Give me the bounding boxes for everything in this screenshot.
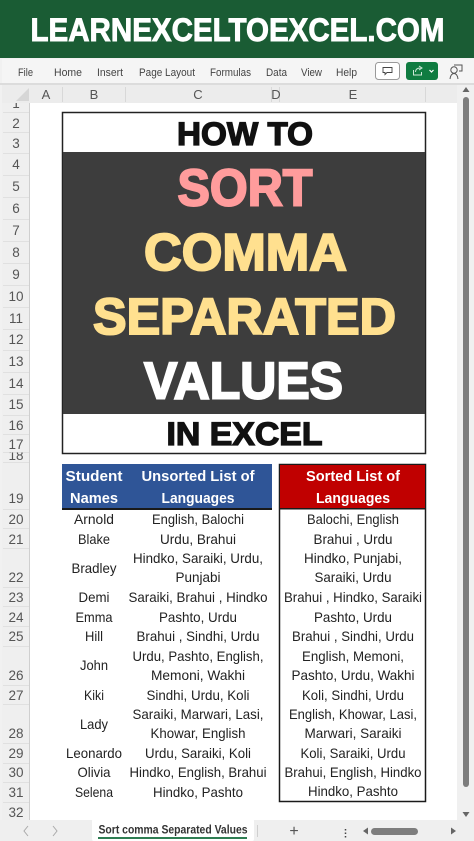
column headers: D	[271, 87, 281, 102]
row number gutter: 15	[8, 397, 24, 412]
row number gutter: 31	[8, 785, 24, 800]
ribbon menu: Page Layout	[139, 67, 195, 79]
ribbon menu: Home	[54, 67, 82, 79]
student names column: Lady	[80, 716, 108, 732]
vertical scrollbar	[457, 85, 474, 820]
heading: in excel: IN EXCEL	[166, 416, 322, 452]
student names column: Leonardo	[66, 745, 122, 761]
table header: student names and unsorted list: Languages	[162, 490, 234, 507]
row number gutter: 7	[12, 223, 20, 238]
ribbon menu: View	[301, 67, 322, 79]
unsorted languages column: Hindko, Pashto	[153, 784, 243, 800]
row number gutter: 10	[8, 289, 24, 304]
unsorted languages column: Urdu, Pashto, English,	[132, 648, 264, 664]
icon: coauthor person	[450, 65, 462, 79]
sorted languages column: English, Khowar, Lasi,	[289, 706, 417, 722]
sheet tab bar	[0, 819, 474, 841]
unsorted languages column: English, Balochi	[152, 511, 244, 527]
student names column: Demi	[78, 589, 110, 605]
column headers	[2, 85, 474, 103]
student names column: Hill	[85, 628, 103, 644]
ribbon menu: Formulas	[210, 67, 251, 79]
sorted languages column: Pashto, Urdu, Wakhi	[292, 667, 414, 683]
sorted languages column	[284, 511, 422, 799]
row number gutter: 27	[8, 688, 24, 703]
sorted languages column: Brahui , Sindhi, Urdu	[292, 628, 414, 644]
sorted languages column: Brahui, English, Hindko	[284, 764, 422, 780]
row number gutter: 26	[8, 668, 24, 683]
column headers: A	[42, 87, 51, 102]
row number gutter	[2, 96, 30, 820]
active sheet tab	[92, 819, 254, 841]
sorted languages column: Pashto, Urdu	[314, 609, 392, 625]
row number gutter: 30	[8, 765, 24, 780]
row number gutter: 6	[12, 201, 20, 216]
unsorted languages column: Urdu, Saraiki, Koli	[145, 745, 251, 761]
row number gutter: 8	[12, 245, 20, 260]
row number gutter: 1	[12, 96, 20, 111]
icon: more dots	[344, 829, 346, 838]
row number gutter: 2	[12, 116, 20, 131]
row number gutter: 25	[8, 629, 24, 644]
student names column: Arnold	[74, 511, 114, 527]
active sheet tab: Sort comma Separated Values	[98, 824, 248, 836]
ribbon menu: Insert	[97, 67, 123, 79]
table header: student names and unsorted list	[62, 464, 272, 510]
ribbon menu	[0, 59, 474, 85]
column headers: C	[193, 87, 203, 102]
row number gutter: 20	[8, 512, 24, 527]
row number gutter: 19	[8, 491, 24, 506]
comment button	[376, 62, 400, 80]
heading: values: VALUES	[144, 352, 343, 410]
sorted header	[280, 465, 425, 510]
row number gutter: 4	[12, 157, 20, 172]
row number gutter: 17	[8, 437, 24, 452]
unsorted languages column: Saraiki, Marwari, Lasi,	[132, 706, 264, 722]
banner: LEARNEXCELTOEXCEL.COM	[30, 12, 444, 48]
row number gutter: 23	[8, 590, 24, 605]
row number gutter: 9	[12, 267, 20, 282]
unsorted languages column: Hindko, English, Brahui	[130, 764, 266, 780]
ribbon menu: Data	[266, 67, 288, 79]
table header: student names and unsorted list: Names	[70, 490, 118, 507]
sorted languages column: Brahui , Urdu	[314, 531, 392, 547]
ribbon menu: Help	[336, 67, 357, 79]
row number gutter: 12	[8, 332, 24, 347]
student names column: Selena	[75, 784, 113, 800]
share button	[406, 62, 438, 80]
row number gutter: 14	[8, 376, 24, 391]
student names column: John	[80, 657, 108, 673]
unsorted languages column: Saraiki, Brahui , Hindko	[128, 589, 268, 605]
table header: student names and unsorted list: Unsorted List of	[142, 468, 255, 485]
row number gutter: 16	[8, 418, 24, 433]
sorted languages column: Hindko, Pashto	[308, 783, 398, 799]
heading: sort: SORT	[178, 160, 313, 218]
sorted header: Languages	[316, 490, 390, 507]
student names column: Bradley	[72, 560, 116, 576]
student names column: Blake	[78, 531, 110, 547]
row number gutter: 24	[8, 610, 24, 625]
horizontal scrollbar	[363, 828, 456, 835]
sorted languages column: Marwari, Saraiki	[304, 725, 402, 741]
row number gutter: 28	[8, 726, 24, 741]
sorted header: Sorted List of	[306, 468, 401, 485]
unsorted languages column: Punjabi	[176, 569, 220, 585]
heading: how to: HOW TO	[177, 116, 313, 152]
student names column: Olivia	[78, 764, 111, 780]
ribbon menu: File	[18, 67, 33, 79]
table header: student names and unsorted list: Student	[66, 468, 123, 485]
unsorted languages column: Memoni, Wakhi	[151, 667, 245, 683]
add sheet button: +	[289, 823, 299, 840]
sorted languages column: Koli, Sindhi, Urdu	[302, 687, 404, 703]
sorted languages column: Hindko, Punjabi,	[304, 550, 402, 566]
title panel	[62, 112, 426, 454]
row number gutter: 22	[8, 570, 24, 585]
unsorted languages column: Sindhi, Urdu, Koli	[146, 687, 250, 703]
unsorted languages column: Brahui , Sindhi, Urdu	[136, 628, 260, 644]
student names column	[66, 511, 122, 800]
student names column: Kiki	[84, 687, 104, 703]
unsorted languages column: Hindko, Saraiki, Urdu,	[133, 550, 263, 566]
unsorted languages column: Urdu, Brahui	[160, 531, 236, 547]
banner	[0, 0, 474, 58]
sorted languages column: Brahui , Hindko, Saraiki	[284, 589, 422, 605]
row number gutter: 32	[8, 805, 24, 820]
row number gutter: 5	[12, 179, 20, 194]
unsorted languages column: Pashto, Urdu	[159, 609, 237, 625]
unsorted languages column	[128, 511, 268, 800]
row number gutter: 21	[8, 532, 24, 547]
sorted languages column: Saraiki, Urdu	[314, 569, 392, 585]
table: sorted	[280, 464, 426, 802]
row number gutter: 29	[8, 746, 24, 761]
sorted languages column: Balochi, English	[307, 511, 399, 527]
row number gutter: 18	[8, 448, 24, 463]
sorted languages column: English, Memoni,	[302, 648, 404, 664]
student names column: Emma	[76, 609, 113, 625]
sorted languages column: Koli, Saraiki, Urdu	[300, 745, 406, 761]
heading: separated: SEPARATED	[93, 288, 396, 345]
sheet area	[30, 103, 457, 820]
unsorted languages column: Khowar, English	[150, 725, 246, 741]
row number gutter: 11	[9, 311, 23, 326]
column headers: B	[90, 87, 98, 102]
row number gutter: 13	[8, 354, 24, 369]
column headers: E	[349, 87, 358, 102]
heading: comma: COMMA	[144, 224, 347, 282]
row number gutter: 3	[12, 136, 20, 151]
table: unsorted	[62, 464, 272, 800]
